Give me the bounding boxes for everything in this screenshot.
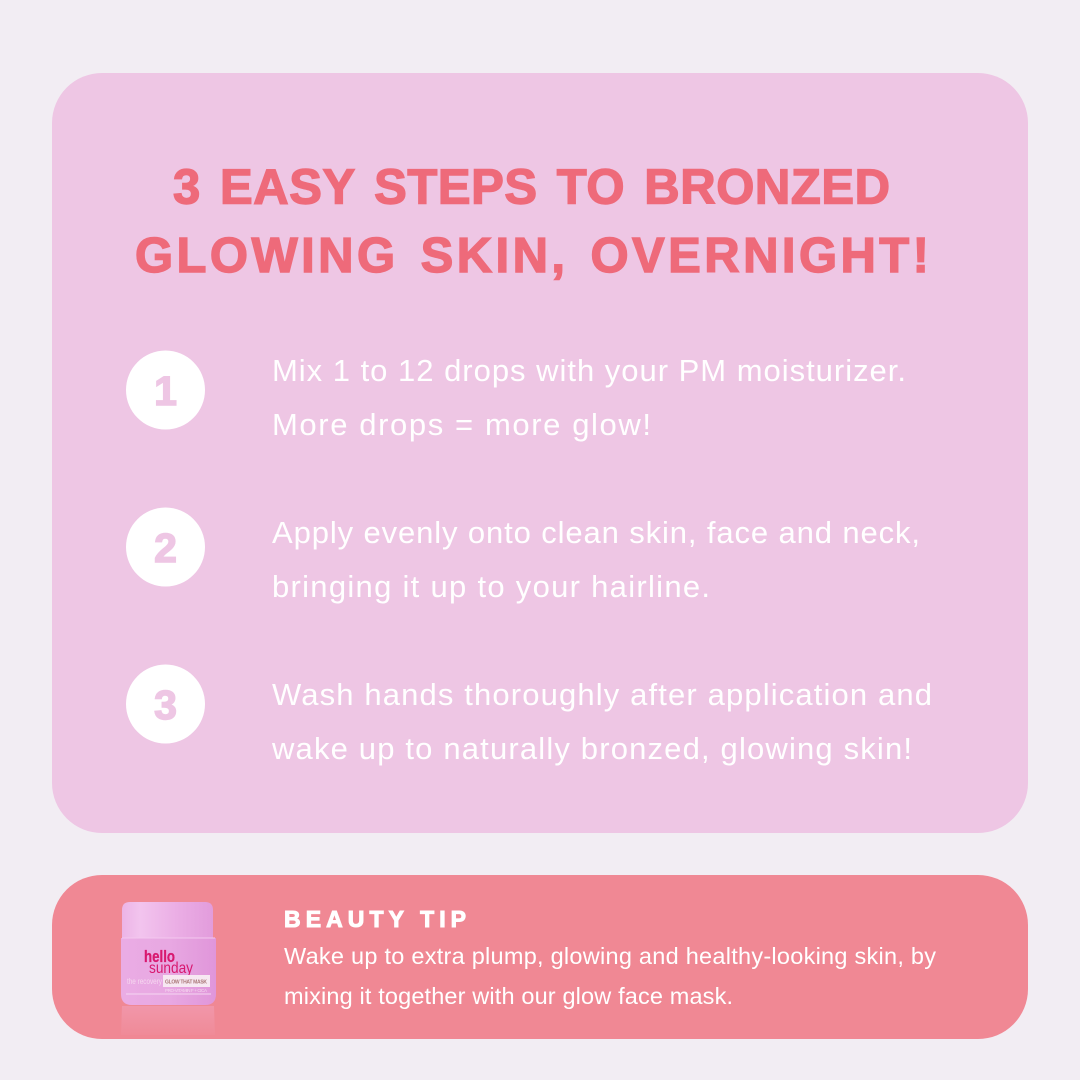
panel: steps xyxy=(52,73,1028,833)
step 3 number badge xyxy=(126,664,205,744)
icon: product jar: sunday xyxy=(149,960,193,977)
icon: product jar: the recovery xyxy=(127,977,162,986)
step 2 number badge xyxy=(126,508,205,586)
step 2 text xyxy=(272,515,920,604)
step 1 number badge: 1 xyxy=(154,368,177,414)
step 2 text: bringing it up to your hairline. xyxy=(272,569,710,604)
icon: product jar: PRO-VITAMIN F + CICA xyxy=(165,988,207,993)
step 3 xyxy=(126,664,932,766)
icon: product jar xyxy=(121,902,216,1035)
step 3 text: wake up to naturally bronzed, glowing skin! xyxy=(271,731,912,766)
step 3 text xyxy=(271,677,932,766)
step 1 xyxy=(126,350,906,442)
title: 3 EASY STEPS TO BRONZED xyxy=(173,160,890,214)
step 3 number badge: 3 xyxy=(154,682,177,728)
step 1 number badge xyxy=(126,350,205,430)
step 1 text: Mix 1 to 12 drops with your PM moisturizer. xyxy=(272,353,906,388)
icon: product jar: hello xyxy=(144,947,175,966)
step 2 number badge: 2 xyxy=(154,525,177,571)
step 1 text xyxy=(272,353,906,442)
tip text: Wake up to extra plump, glowing and healthy-looking skin, by xyxy=(284,943,936,969)
panel: beauty tip xyxy=(52,875,1028,1039)
step 1 text: More drops = more glow! xyxy=(272,407,651,442)
title xyxy=(135,160,929,283)
tip text xyxy=(284,943,936,1009)
icon: product jar: GLOW THAT MASK xyxy=(165,980,207,986)
title: GLOWING SKIN, OVERNIGHT! xyxy=(135,229,929,283)
tip text: mixing it together with our glow face mask. xyxy=(284,983,733,1009)
step 3 text: Wash hands thoroughly after application and xyxy=(272,677,932,712)
step 2 text: Apply evenly onto clean skin, face and neck, xyxy=(272,515,920,550)
tip heading: BEAUTY TIP xyxy=(284,906,466,932)
step 2 xyxy=(126,508,920,604)
